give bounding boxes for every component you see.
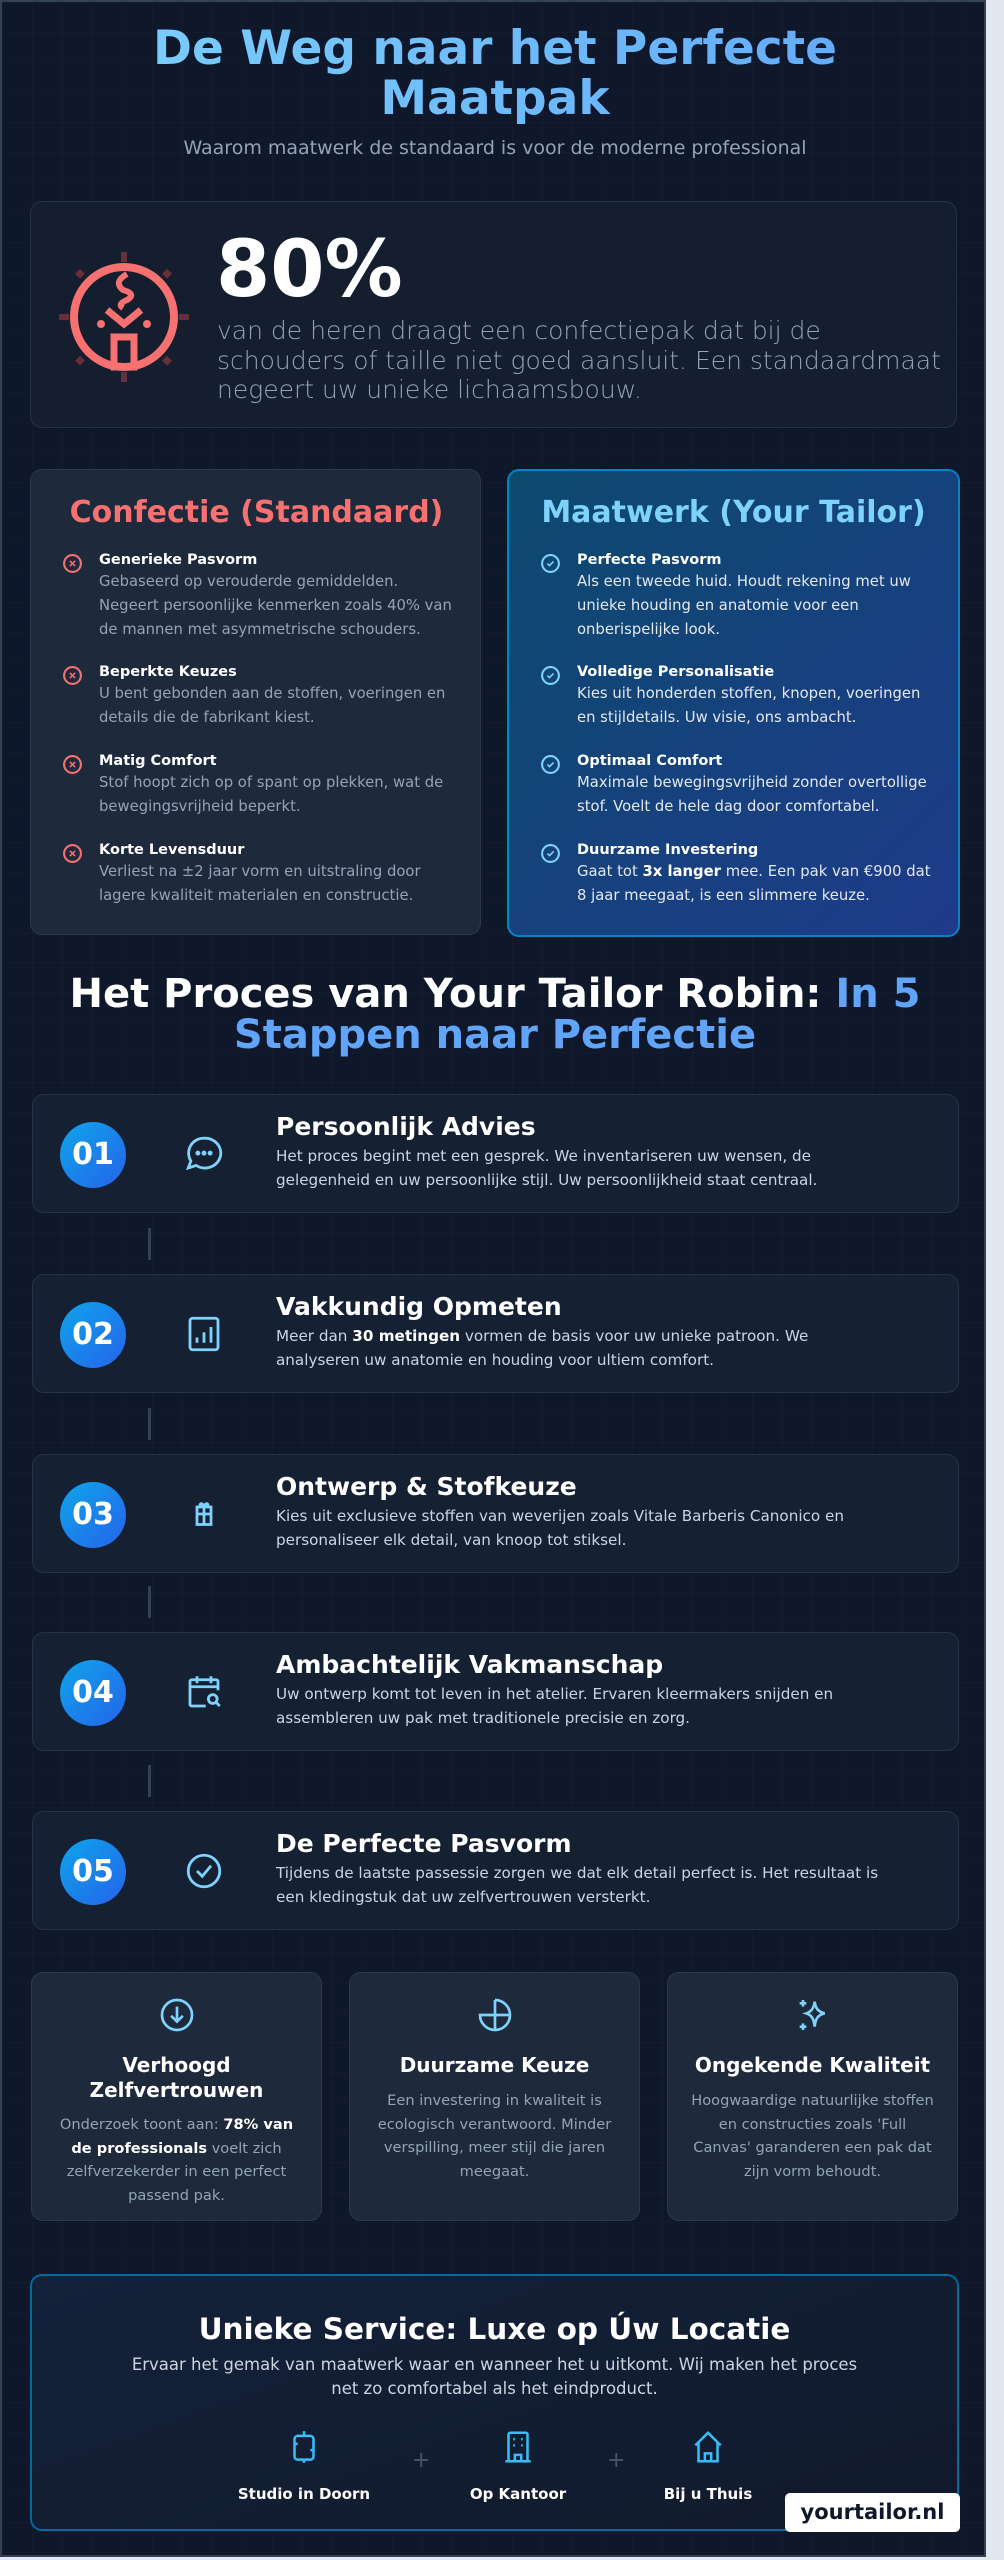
- step 3: personaliseer elk detail, van knoop tot stiksel.: [276, 1531, 626, 1549]
- benefit: ongekende kwaliteit: Hoogwaardige natuurlijke stoffen en constructies zoals 'Full Canvas' garanderen een pak dat zijn vorm behoudt.: [691, 2092, 934, 2180]
- service text: Ervaar het gemak van maatwerk waar en wanneer het u uitkomt. Wij maken het proces net zo comfortabel als het eindproduct.: [132, 2355, 857, 2398]
- benefit: zelfvertrouwen: Zelfvertrouwen: [90, 2078, 263, 2102]
- item: perfecte pasvorm: Als een tweede huid. Houdt rekening met uw unieke houding en anatomie voor een onberispelijke look.: [577, 573, 911, 638]
- icon: calendar: [188, 1676, 221, 1708]
- heading: confectie: Confectie (Standaard): [70, 495, 443, 530]
- icon: chart: [188, 1316, 220, 1352]
- item: matig comfort: Stof hoopt zich op of spant op plekken, wat de bewegingsvrijheid beperkt.: [99, 774, 443, 815]
- process heading: Stappen naar Perfectie: [234, 1012, 756, 1058]
- panel: maatwerk: [507, 469, 960, 937]
- item: beperkte keuzes: [63, 664, 445, 726]
- item: duurzame investering: Gaat tot 3x langer mee. Een pak van €900 dat 8 jaar meegaat, is een slimmere keuze.: [577, 863, 931, 904]
- stat text: van de heren draagt een confectiepak dat bij de: [217, 316, 821, 345]
- item: korte levensduur: Verliest na ±2 jaar vorm en uitstraling door lagere kwaliteit materialen en constructie.: [99, 863, 421, 904]
- item: volledige personalisatie: Volledige Personalisatie: [577, 664, 774, 680]
- item: volledige personalisatie: [541, 664, 920, 726]
- item: volledige personalisatie: Kies uit honderden stoffen, knopen, voeringen en stijldetails. Uw visie, ons ambacht.: [577, 685, 920, 726]
- stat text: negeert uw unieke lichaamsbouw.: [217, 375, 642, 404]
- step 4: assembleren uw pak met traditionele precisie en zorg.: [276, 1709, 690, 1727]
- benefit: duurzame keuze: Een investering in kwaliteit is ecologisch verantwoord. Minder verspilling, meer stijl die jaren meegaat.: [378, 2092, 611, 2180]
- item: optimaal comfort: [541, 753, 927, 815]
- step 5: [32, 1811, 959, 1930]
- item: perfecte pasvorm: [541, 552, 911, 638]
- item: optimaal comfort: Optimaal Comfort: [577, 753, 722, 769]
- plus separators: +: [412, 2448, 430, 2473]
- item: generieke pasvorm: Gebaseerd op verouderde gemiddelden. Negeert persoonlijke kenmerken zoals 40% van de mannen met asymmetrische schouders.: [99, 573, 452, 638]
- item: beperkte keuzes: U bent gebonden aan de stoffen, voeringen en details die de fabrikant kiest.: [99, 685, 445, 726]
- item: korte levensduur: [63, 842, 421, 904]
- item: matig comfort: Matig Comfort: [99, 753, 217, 769]
- item: generieke pasvorm: Generieke Pasvorm: [99, 552, 257, 568]
- benefit: zelfvertrouwen: Verhoogd: [122, 2053, 231, 2077]
- item: matig comfort: [63, 753, 443, 815]
- service heading: Unieke Service: Luxe op Úw Locatie: [199, 2312, 790, 2346]
- step 3: [32, 1454, 959, 1573]
- item: duurzame investering: Duurzame Investering: [577, 842, 758, 858]
- step 2: 02: [72, 1317, 114, 1352]
- step 1: Het proces begint met een gesprek. We inventariseren uw wensen, de: [276, 1147, 811, 1165]
- icon: check circle: [186, 1854, 222, 1888]
- step 3: Ontwerp & Stofkeuze: [276, 1472, 577, 1501]
- item: optimaal comfort: Maximale bewegingsvrijheid zonder overtollige stof. Voelt de hele dag door comfortabel.: [577, 774, 927, 815]
- step 1: gelegenheid en uw persoonlijke stijl. Uw persoonlijkheid staat centraal.: [276, 1171, 817, 1189]
- step 4: 04: [72, 1675, 114, 1710]
- process heading: [70, 971, 920, 1058]
- item: beperkte keuzes: Beperkte Keuzes: [99, 664, 237, 680]
- stat number: 80%: [216, 225, 403, 315]
- title: [2, 24, 988, 124]
- main container: +: [607, 2448, 625, 2473]
- benefit: zelfvertrouwen: Onderzoek toont aan: 78% van de professionals voelt zich zelfverzekerder in een perfect passend pak.: [60, 2116, 293, 2204]
- benefit: ongekende kwaliteit: Ongekende Kwaliteit: [695, 2053, 930, 2077]
- icon: gift box: [196, 1502, 212, 1526]
- title: De Weg naar het Perfecte: [153, 21, 837, 76]
- step 5: een kledingstuk dat uw zelfvertrouwen versterkt.: [276, 1888, 650, 1906]
- step 3: 03: [72, 1497, 114, 1532]
- item: korte levensduur: Korte Levensduur: [99, 842, 244, 858]
- location: studio: Studio in Doorn: [238, 2485, 370, 2503]
- step 5: De Perfecte Pasvorm: [276, 1829, 572, 1858]
- step 1: 01: [72, 1137, 114, 1172]
- benefit: duurzame keuze: [349, 1972, 640, 2221]
- step 2: [32, 1274, 959, 1393]
- step 2: Vakkundig Opmeten: [276, 1292, 562, 1321]
- step 3: Kies uit exclusieve stoffen van weverijen zoals Vitale Barberis Canonico en: [276, 1507, 844, 1525]
- heading: maatwerk: Maatwerk (Your Tailor): [541, 495, 926, 530]
- location: studio: [238, 2431, 370, 2503]
- stat text: [217, 316, 941, 404]
- step 1: Persoonlijk Advies: [276, 1112, 536, 1141]
- step 4: Uw ontwerp komt tot leven in het atelier. Ervaren kleermakers snijden en: [276, 1685, 833, 1703]
- badge: yourtailor.nl: yourtailor.nl: [801, 2500, 944, 2524]
- stat text: schouders of taille niet goed aansluit. Een standaardmaat: [217, 346, 941, 374]
- location: kantoor: [470, 2432, 566, 2503]
- location: thuis: Bij u Thuis: [664, 2485, 752, 2503]
- item: generieke pasvorm: [63, 552, 452, 638]
- item: perfecte pasvorm: Perfecte Pasvorm: [577, 552, 722, 568]
- panel: statistic: [30, 201, 957, 428]
- step 4: Ambachtelijk Vakmanschap: [276, 1650, 663, 1679]
- step 1: [32, 1094, 959, 1213]
- step 5: 05: [72, 1854, 114, 1889]
- benefit: ongekende kwaliteit: [667, 1972, 958, 2221]
- step 2: analyseren uw anatomie en houding voor ultiem comfort.: [276, 1351, 714, 1369]
- location: thuis: [664, 2431, 752, 2503]
- process heading: Het Proces van Your Tailor Robin: In 5: [70, 971, 920, 1017]
- benefit: duurzame keuze: Duurzame Keuze: [400, 2053, 589, 2077]
- location: kantoor: Op Kantoor: [470, 2485, 566, 2503]
- title: Maatpak: [380, 71, 610, 126]
- icon: ill-fitting suit figure: [59, 252, 189, 382]
- panel: unique service: [30, 2274, 959, 2531]
- subtitle: Waarom maatwerk de standaard is voor de moderne professional: [183, 137, 807, 159]
- panel: confectie: [30, 469, 481, 935]
- step 2: Meer dan 30 metingen vormen de basis voor uw unieke patroon. We: [276, 1327, 808, 1345]
- item: duurzame investering: [541, 842, 931, 904]
- badge: yourtailor.nl: [785, 2493, 960, 2532]
- icon: chat: [186, 1136, 222, 1170]
- step 4: [32, 1632, 959, 1751]
- benefit: zelfvertrouwen: [31, 1972, 322, 2221]
- step 5: Tijdens de laatste passessie zorgen we dat elk detail perfect is. Het resultaat is: [276, 1864, 878, 1882]
